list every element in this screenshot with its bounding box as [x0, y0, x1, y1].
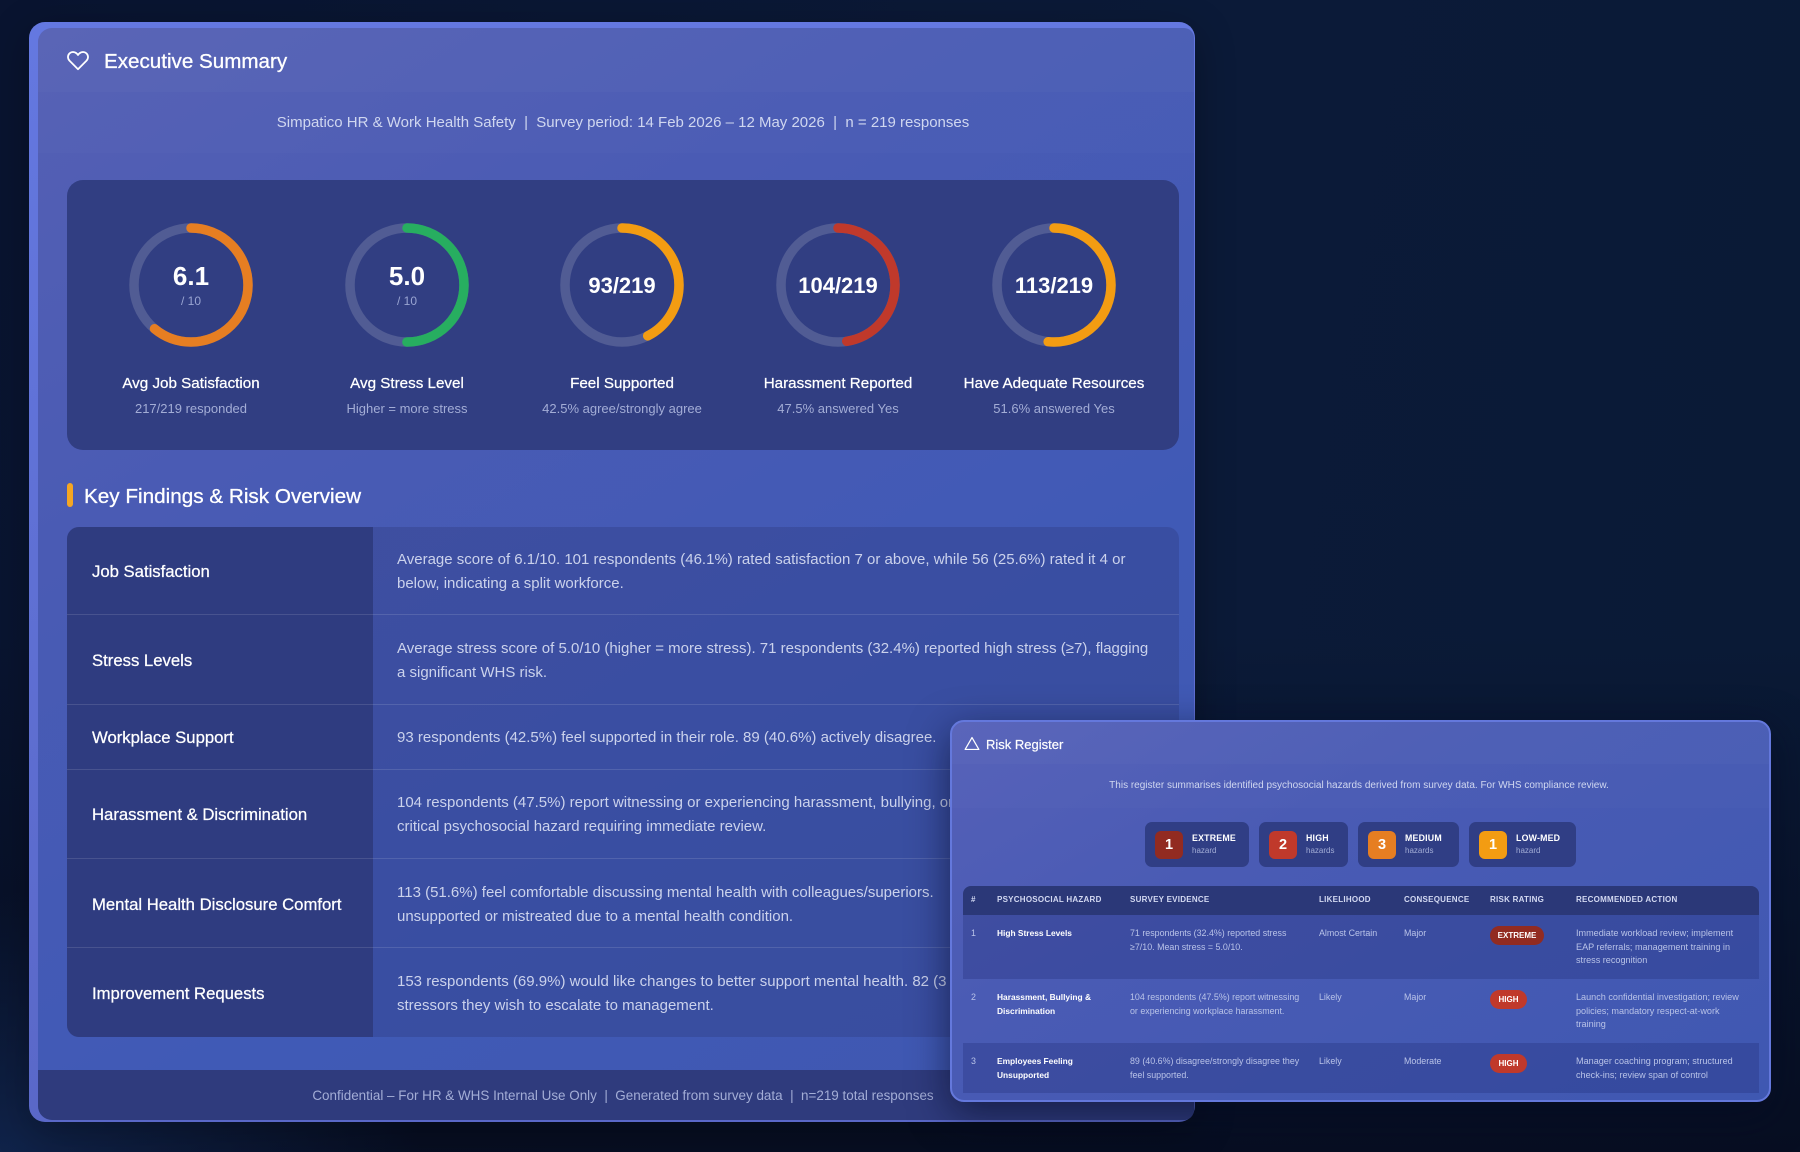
- footer band: [38, 1070, 1194, 1120]
- row text: 104 respondents (47.5%) report witnessing or experiencing harassment, bullying, or: [397, 794, 953, 811]
- badge: low-med: [1469, 822, 1576, 867]
- table row 3: 89 (40.6%) disagree/strongly disagree they: [1130, 1056, 1299, 1066]
- gauge: stress level: [345, 223, 469, 416]
- table row 1: High Stress Levels: [997, 928, 1072, 938]
- row label: Harassment & Discrimination: [92, 805, 307, 824]
- gauge: adequate resources: [964, 223, 1144, 416]
- table row 2: Launch confidential investigation; review: [1576, 992, 1739, 1002]
- title: Executive Summary: [104, 50, 287, 73]
- value: 113/219: [1015, 273, 1093, 298]
- badge: extreme: [1145, 822, 1249, 867]
- row label: Workplace Support: [92, 728, 234, 747]
- sublabel: 42.5% agree/strongly agree: [542, 401, 702, 416]
- row text: 113 (51.6%) feel comfortable discussing mental health with colleagues/superiors.: [397, 884, 934, 901]
- value: 5.0: [389, 261, 425, 291]
- row text: 153 respondents (69.9%) would like changes to better support mental health. 82 (3: [397, 973, 947, 990]
- table row 3: check-ins; review span of control: [1576, 1070, 1708, 1080]
- table row 3: 3: [971, 1056, 976, 1066]
- table row 2: policies; mandatory respect-at-work: [1576, 1006, 1720, 1016]
- row text: unsupported or mistreated due to a mental health condition.: [397, 908, 793, 925]
- ring: [345, 223, 469, 347]
- table row 1: Major: [1404, 928, 1426, 938]
- rating pill: extreme: [1490, 926, 1544, 945]
- row label: Stress Levels: [92, 651, 192, 670]
- value: 93/219: [588, 273, 656, 298]
- row text: Average score of 6.1/10. 101 respondents (46.1%) rated satisfaction 7 or above, while 56 (25.6%) rated it 4 or: [397, 551, 1125, 568]
- table row 3: feel supported.: [1130, 1070, 1189, 1080]
- row: workplace support: [67, 705, 1179, 770]
- subtitle text: Simpatico HR & Work Health Safety | Survey period: 14 Feb 2026 – 12 May 2026 | n = 219 responses: [277, 114, 969, 131]
- table row 1: Immediate workload review; implement: [1576, 928, 1733, 938]
- row text: [397, 884, 934, 925]
- ring: [776, 223, 900, 347]
- table row 2: or experiencing workplace harassment.: [1130, 1006, 1284, 1016]
- panel: gauges: [67, 180, 1179, 450]
- badge: low-med: 1: [1489, 837, 1497, 853]
- panel: findings table: [67, 527, 1179, 1037]
- ring: [992, 223, 1116, 347]
- rating pill: extreme: EXTREME: [1498, 931, 1536, 940]
- sublabel: 47.5% answered Yes: [777, 401, 899, 416]
- subtitle band: [38, 92, 1194, 153]
- rating pill: high: [1490, 990, 1527, 1009]
- table row 3: Likely: [1319, 1056, 1342, 1066]
- badge: high: hazards: [1306, 846, 1334, 855]
- gauge: harassment reported: [764, 223, 912, 416]
- footer text: Confidential – For HR & WHS Internal Use Only | Generated from survey data | n=219 total responses: [312, 1088, 934, 1103]
- badge: low-med: hazard: [1516, 846, 1540, 855]
- ring: [129, 223, 253, 347]
- badge: low-med: LOW-MED: [1516, 833, 1560, 843]
- badge: extreme: 1: [1165, 837, 1173, 853]
- row label: Mental Health Disclosure Comfort: [92, 895, 341, 914]
- row text: Average stress score of 5.0/10 (higher = more stress). 71 respondents (32.4%) reported high stress (≥7), flagging: [397, 640, 1148, 657]
- icon: warning triangle: [964, 736, 980, 750]
- row: job satisfaction: [67, 527, 1179, 615]
- badge: medium: hazards: [1405, 846, 1433, 855]
- heading: key findings: [67, 483, 362, 508]
- heading accent bar: [67, 483, 73, 507]
- table header: PSYCHOSOCIAL HAZARD: [997, 895, 1102, 904]
- row: improvement requests: [92, 973, 947, 1014]
- header: executive summary: [38, 28, 1194, 92]
- table header: RECOMMENDED ACTION: [1576, 895, 1678, 904]
- row text: [397, 551, 1126, 592]
- table label column: [67, 527, 373, 1037]
- badge: extreme: EXTREME: [1192, 833, 1236, 843]
- table row 2: Likely: [1319, 992, 1342, 1002]
- row text: [397, 973, 947, 1014]
- table row 3: Moderate: [1404, 1056, 1442, 1066]
- risk title: Risk Register: [986, 737, 1063, 752]
- row text: [397, 640, 1148, 681]
- risk header band: [952, 722, 1769, 764]
- table row 2: 104 respondents (47.5%) report witnessing: [1130, 992, 1299, 1002]
- badge: medium: MEDIUM: [1405, 833, 1442, 843]
- risk subtitle: This register summarises identified psychosocial hazards derived from survey data. For WHS compliance review.: [1109, 780, 1609, 791]
- label: Avg Stress Level: [350, 375, 464, 392]
- badge: high: [1259, 822, 1348, 867]
- table row 2: [971, 990, 1739, 1029]
- row text: critical psychosocial hazard requiring immediate review.: [397, 818, 766, 835]
- table header: LIKELIHOOD: [1319, 895, 1371, 904]
- risk table: [963, 886, 1759, 1093]
- row: mental health disclosure: [67, 859, 1179, 948]
- table row 1: [963, 915, 1759, 979]
- hazard count badges: [1145, 822, 1576, 867]
- table row 2: Harassment, Bullying &: [997, 992, 1091, 1002]
- sublabel: Higher = more stress: [346, 401, 468, 416]
- label: Harassment Reported: [764, 375, 912, 392]
- icon: heart: [67, 51, 89, 70]
- table row 1: EAP referrals; management training in: [1576, 942, 1730, 952]
- value: 6.1: [173, 261, 209, 291]
- badge: medium: 3: [1378, 837, 1386, 853]
- table header: #: [971, 895, 976, 904]
- panel: risk register card: [950, 720, 1771, 1102]
- value: 104/219: [798, 273, 878, 298]
- row text: 93 respondents (42.5%) feel supported in their role. 89 (40.6%) actively disagree.: [397, 729, 936, 746]
- rating pill: high: [1490, 1054, 1527, 1073]
- panel: executive summary card: [29, 22, 1195, 1122]
- label: Feel Supported: [570, 375, 674, 392]
- row: stress levels: [67, 615, 1179, 705]
- row text: [397, 794, 953, 835]
- row text: a significant WHS risk.: [397, 664, 547, 681]
- table row 1: Almost Certain: [1319, 928, 1377, 938]
- sublabel: 51.6% answered Yes: [993, 401, 1115, 416]
- table row 2: Discrimination: [997, 1006, 1055, 1016]
- table row 3: Employees Feeling: [997, 1056, 1073, 1066]
- table row 3: [963, 1043, 1759, 1093]
- table header: SURVEY EVIDENCE: [1130, 895, 1209, 904]
- risk subtitle band: [952, 764, 1769, 808]
- table header: RISK RATING: [1490, 895, 1544, 904]
- badge: medium: [1358, 822, 1459, 867]
- label: Avg Job Satisfaction: [122, 375, 260, 392]
- badge: extreme: hazard: [1192, 846, 1216, 855]
- unit: / 10: [181, 294, 201, 308]
- unit: / 10: [397, 294, 417, 308]
- table header: CONSEQUENCE: [1404, 895, 1469, 904]
- ring: [560, 223, 684, 347]
- table row 1: ≥7/10. Mean stress = 5.0/10.: [1130, 942, 1243, 952]
- table row 2: training: [1576, 1019, 1606, 1029]
- gauge: feel supported: [542, 223, 702, 416]
- heading text: Key Findings & Risk Overview: [84, 485, 361, 508]
- table row 2: Major: [1404, 992, 1426, 1002]
- row text: stressors they wish to escalate to management.: [397, 997, 714, 1014]
- table row 1: 1: [971, 928, 976, 938]
- row label: Improvement Requests: [92, 984, 265, 1003]
- table row 1: stress recognition: [1576, 955, 1647, 965]
- label: Have Adequate Resources: [964, 375, 1144, 392]
- row: harassment: [67, 770, 1179, 859]
- table row 2: 2: [971, 992, 976, 1002]
- rating pill: high: HIGH: [1498, 995, 1518, 1004]
- table row 1: 71 respondents (32.4%) reported stress: [1130, 928, 1286, 938]
- gauge: job satisfaction: [122, 223, 260, 416]
- sublabel: 217/219 responded: [135, 401, 247, 416]
- row text: below, indicating a split workforce.: [397, 575, 624, 592]
- table row 3: Unsupported: [997, 1070, 1049, 1080]
- rating pill: high: HIGH: [1498, 1059, 1518, 1068]
- row label: Job Satisfaction: [92, 562, 210, 581]
- badge: high: HIGH: [1306, 833, 1329, 843]
- badge: high: 2: [1279, 837, 1287, 853]
- table row 3: Manager coaching program; structured: [1576, 1056, 1733, 1066]
- table header: [963, 886, 1759, 915]
